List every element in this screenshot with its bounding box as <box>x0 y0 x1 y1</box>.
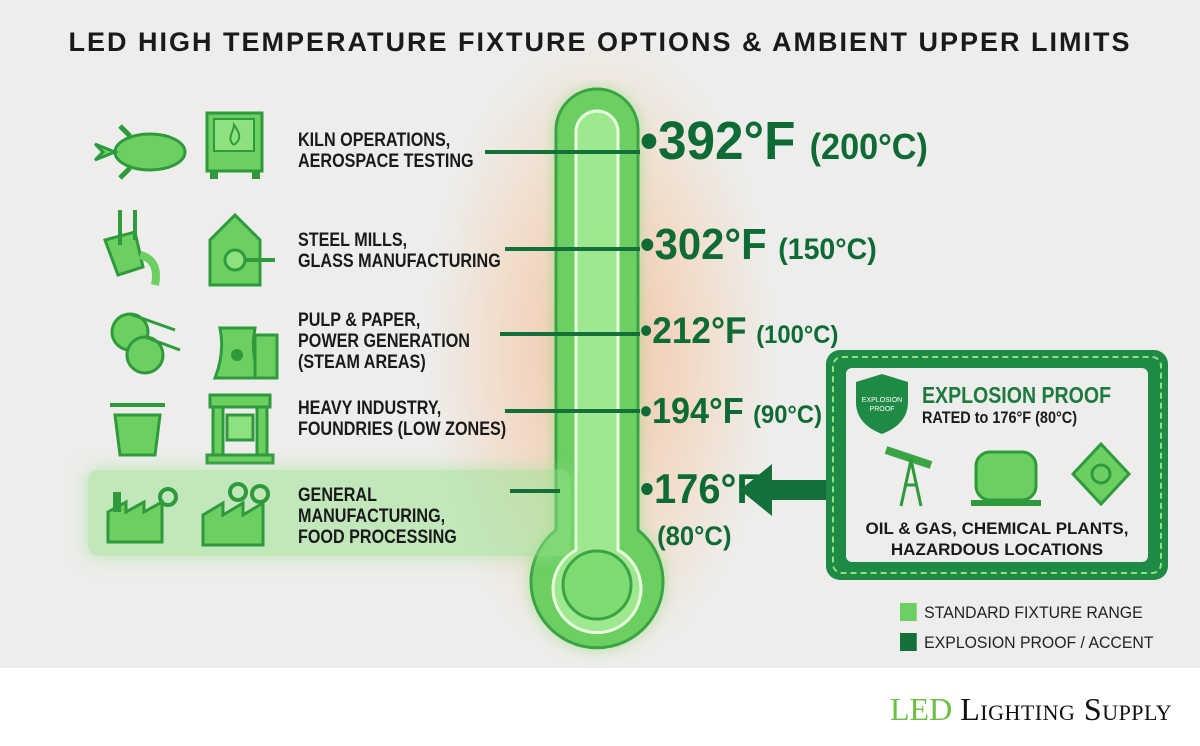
text: KILN OPERATIONS, <box>298 130 450 151</box>
legend: STANDARD FIXTURE RANGE <box>924 603 1143 622</box>
text: STEEL MILLS, <box>298 230 407 251</box>
title: LED HIGH TEMPERATURE FIXTURE OPTIONS & AMBIENT UPPER LIMITS <box>68 27 1132 57</box>
row 5 highlighted <box>88 470 570 556</box>
logo: LED Lighting Supply <box>890 691 1172 727</box>
row 3 <box>110 310 640 380</box>
icon: factory 1 <box>106 487 178 544</box>
text: FOUNDRIES (LOW ZONES) <box>298 419 506 440</box>
text: HAZARDOUS LOCATIONS <box>891 540 1103 559</box>
text: HEAVY INDUSTRY, <box>298 398 441 419</box>
row 2 <box>103 210 640 286</box>
icon: power plant <box>212 326 278 380</box>
panel: explosion proof: RATED to 176°F (80°C) <box>922 408 1077 427</box>
text <box>298 310 470 373</box>
text: (STEAM AREAS) <box>298 352 426 373</box>
row 1 <box>94 112 640 180</box>
footer <box>0 668 1200 746</box>
temp 176 <box>640 465 761 551</box>
text <box>298 485 457 548</box>
icon: shield: PROOF <box>870 406 894 413</box>
icon: furnace <box>208 213 275 286</box>
text <box>866 519 1128 559</box>
icon: crucible <box>110 403 165 456</box>
icon: rocket <box>94 124 186 180</box>
background glow <box>430 40 770 660</box>
temp 176: (80°C) <box>657 521 731 551</box>
temp 194: •194°F (90°C) <box>640 390 822 431</box>
text <box>298 230 501 272</box>
thermometer <box>522 80 672 658</box>
icon: factory 2 <box>202 482 270 546</box>
temp 302: •302°F (150°C) <box>640 220 877 269</box>
text: GLASS MANUFACTURING <box>298 251 501 272</box>
legend: EXPLOSION PROOF / ACCENT <box>924 633 1153 652</box>
icon: shield <box>856 374 908 434</box>
icons: oil, tank, biohazard <box>884 442 1131 506</box>
text <box>298 398 506 440</box>
text: GENERAL <box>298 485 377 506</box>
icon: ladle <box>103 210 160 286</box>
icon: kiln <box>206 112 264 179</box>
temp 392: •392°F (200°C) <box>640 111 928 171</box>
heading: EXPLOSION PROOF <box>922 382 1111 408</box>
text: AEROSPACE TESTING <box>298 151 474 172</box>
text <box>298 130 474 172</box>
text: PULP & PAPER, <box>298 310 420 331</box>
text: OIL & GAS, CHEMICAL PLANTS, <box>866 519 1128 538</box>
text: MANUFACTURING, <box>298 506 445 527</box>
temp 176: •176°F <box>640 465 761 512</box>
legend <box>900 603 1154 652</box>
icon: paper rolls <box>110 312 180 374</box>
text: FOOD PROCESSING <box>298 527 457 548</box>
arrow <box>744 464 826 516</box>
temp 212: •212°F (100°C) <box>640 310 838 351</box>
row 4 <box>110 394 640 464</box>
icon: shield: EXPLOSION <box>862 397 902 404</box>
text: POWER GENERATION <box>298 331 470 352</box>
panel: explosion proof <box>826 350 1168 580</box>
icon: press <box>206 394 274 464</box>
